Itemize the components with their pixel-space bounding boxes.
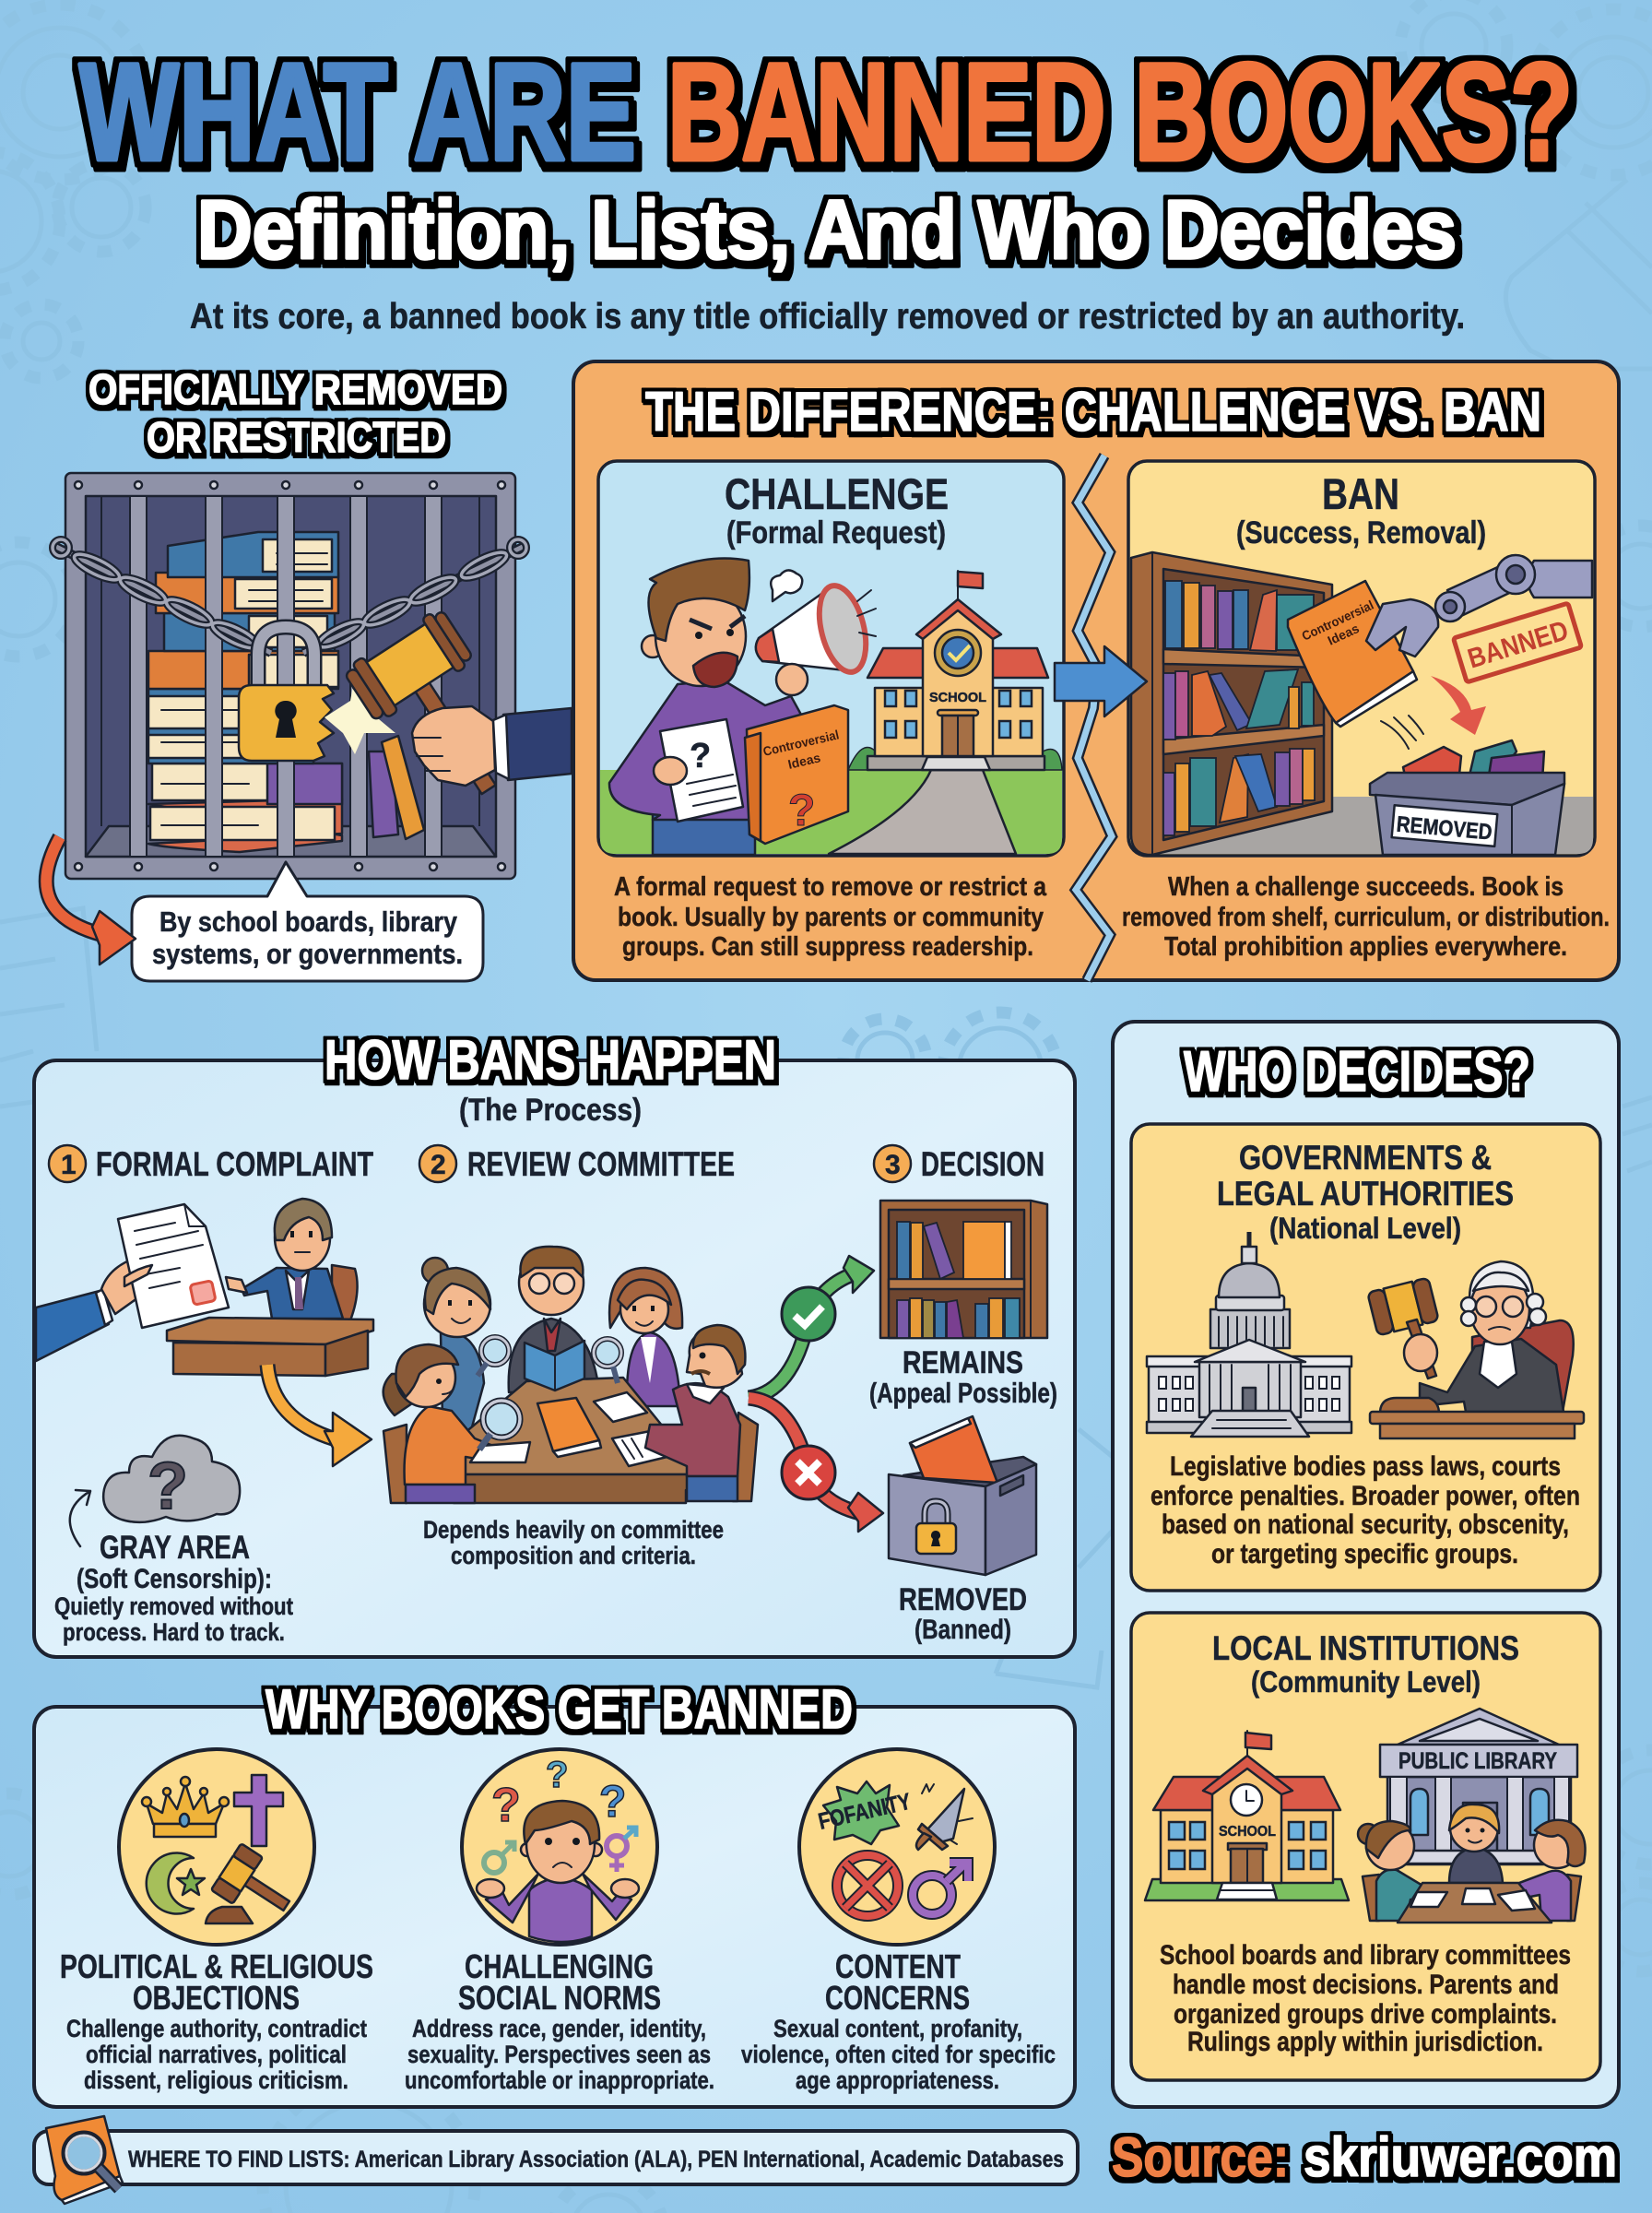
text: local institutions description: Rulings apply within jurisdiction. bbox=[1187, 2027, 1543, 2057]
illustration: capitol building bbox=[1147, 1232, 1351, 1437]
text: where to find lists: WHERE TO FIND LISTS: American Library Association (ALA), PEN International, Academic Databases bbox=[128, 2147, 1064, 2172]
illustration: robotic arm removes book: Controversial bbox=[1300, 598, 1375, 644]
step 2 label: REVIEW COMMITTEE bbox=[467, 1145, 735, 1183]
arrow: into removed bin bbox=[1431, 676, 1486, 735]
icon: book with magnifier bbox=[46, 2116, 123, 2204]
panel: ban bbox=[1128, 461, 1595, 856]
step 3 label: DECISION bbox=[921, 1145, 1044, 1183]
text: content concerns: age appropriateness. bbox=[796, 2066, 999, 2094]
arrow: red curved to callout bbox=[46, 837, 136, 964]
text: gray area: (Soft Censorship): bbox=[77, 1564, 272, 1594]
text: content concerns bbox=[741, 1947, 1056, 2094]
icon circle: social norms: ? bbox=[546, 1755, 568, 1795]
title bbox=[79, 34, 1573, 189]
bar: where to find lists bbox=[34, 2116, 1078, 2204]
subtitle: Definition, Lists, And Who Decides bbox=[197, 184, 1457, 277]
text: removed bbox=[899, 1582, 1027, 1645]
divider: lightning crack bbox=[1076, 456, 1112, 980]
icon circle: social norms: ? bbox=[599, 1778, 626, 1827]
text: committee note bbox=[423, 1516, 724, 1569]
text: political and religious: dissent, religious criticism. bbox=[84, 2066, 348, 2094]
illustration: removed bin: REMOVED bbox=[1396, 812, 1493, 846]
panel: why books get banned bbox=[34, 1678, 1075, 2107]
illustration: robotic arm removes book bbox=[1288, 555, 1592, 727]
heading: officially removed or restricted: OFFICIALLY REMOVED bbox=[88, 365, 502, 413]
subheading: the process: (The Process) bbox=[459, 1093, 642, 1128]
panel: challenge bbox=[598, 461, 1064, 856]
source credit: Source: bbox=[1112, 2126, 1289, 2188]
heading: challenge: CHALLENGE bbox=[725, 469, 949, 518]
text: remains bbox=[869, 1345, 1057, 1409]
text: governments description: Legislative bodies pass laws, courts bbox=[1170, 1451, 1561, 1482]
heading: who decides: WHO DECIDES? bbox=[1184, 1040, 1530, 1104]
icon circle: political and religious bbox=[119, 1749, 314, 1945]
chains bbox=[53, 539, 526, 653]
callout: who removes: By school boards, library bbox=[159, 905, 458, 938]
illustration: formal complaint bbox=[36, 1199, 373, 1376]
text: challenge description: groups. Can still suppress readership. bbox=[622, 932, 1033, 962]
illustration: locked book cage bbox=[53, 473, 572, 879]
arrow: complaint to committee bbox=[267, 1365, 372, 1466]
title: WHAT ARE bbox=[79, 34, 636, 189]
arrow: challenge to ban bbox=[1055, 646, 1147, 716]
fallen books bbox=[369, 751, 398, 837]
icon: gray cloud: ? bbox=[148, 1450, 188, 1523]
text: removed: (Banned) bbox=[914, 1615, 1011, 1645]
card: governments and legal authorities: LEGAL AUTHORITIES bbox=[1217, 1175, 1514, 1213]
illustration: robotic arm removes book: Ideas bbox=[1326, 621, 1362, 648]
icon circle: social norms bbox=[462, 1749, 657, 1945]
illustration: school: SCHOOL bbox=[1219, 1824, 1276, 1840]
source credit bbox=[1112, 2126, 1617, 2188]
illustration: school scene bbox=[600, 571, 1062, 854]
bars bbox=[130, 496, 442, 857]
text: content concerns: Sexual content, profanity, bbox=[773, 2015, 1022, 2042]
illustration: public library meeting: PUBLIC LIBRARY bbox=[1398, 1748, 1557, 1774]
text: governments description: or targeting specific groups. bbox=[1211, 1539, 1518, 1569]
icon circle: social norms: ? bbox=[491, 1779, 521, 1832]
illustration: review committee bbox=[384, 1247, 758, 1503]
text: local institutions description bbox=[1160, 1940, 1571, 2057]
icon circle: content concerns bbox=[799, 1749, 995, 1945]
illustration: locked box bbox=[889, 1416, 1036, 1575]
definition sentence: At its core, a banned book is any title officially removed or restricted by an authority. bbox=[190, 297, 1465, 337]
illustration: school bbox=[1145, 1731, 1349, 1900]
callout: who removes bbox=[132, 862, 483, 981]
text: local institutions description: handle most decisions. Parents and bbox=[1173, 1970, 1559, 2000]
step 2 label bbox=[419, 1145, 735, 1183]
arrow: gray area to cloud bbox=[70, 1490, 90, 1546]
card: governments and legal authorities bbox=[1131, 1124, 1600, 1591]
heading: officially removed or restricted: OR RESTRICTED bbox=[147, 413, 446, 461]
illustration: angry parent with megaphone: ? bbox=[788, 787, 815, 835]
subheading: formal request: (Formal Request) bbox=[726, 515, 946, 550]
step 1 label: 1 bbox=[61, 1150, 77, 1180]
source credit: skriuwer.com bbox=[1304, 2126, 1617, 2188]
text: committee note: composition and criteria. bbox=[451, 1542, 696, 1569]
text: remains: REMAINS bbox=[903, 1345, 1023, 1380]
text: challenge description: book. Usually by parents or community bbox=[618, 903, 1044, 932]
heading: how bans happen: HOW BANS HAPPEN bbox=[324, 1029, 776, 1091]
text: social norms bbox=[405, 1947, 714, 2094]
heading: local institutions: LOCAL INSTITUTIONS bbox=[1212, 1629, 1519, 1667]
impact spark bbox=[324, 676, 395, 754]
step 1 label: FORMAL COMPLAINT bbox=[96, 1145, 373, 1183]
illustration: angry parent with megaphone: ? bbox=[690, 737, 711, 775]
text: challenge description bbox=[614, 872, 1047, 962]
subheading: national level: (National Level) bbox=[1269, 1212, 1461, 1245]
text: content concerns: CONTENT bbox=[835, 1947, 961, 1985]
illustration: removed bin bbox=[1370, 740, 1564, 855]
heading: governments: GOVERNMENTS & bbox=[1239, 1139, 1492, 1177]
callout: who removes: systems, or governments. bbox=[152, 938, 463, 970]
panel: who decides bbox=[1113, 1022, 1619, 2107]
book stack bbox=[148, 532, 342, 852]
motion lines bbox=[1381, 716, 1423, 749]
heading: why books get banned: WHY BOOKS GET BANNED bbox=[266, 1678, 853, 1740]
text: social norms: CHALLENGING bbox=[465, 1947, 654, 1985]
step 3 label bbox=[874, 1145, 1044, 1183]
illustration: floor and bookcase bbox=[1131, 552, 1593, 855]
illustration: bookshelf remains bbox=[880, 1201, 1047, 1338]
card: local institutions bbox=[1131, 1613, 1600, 2080]
text: gray area: process. Hard to track. bbox=[63, 1618, 285, 1646]
subheading: success removal: (Success, Removal) bbox=[1236, 515, 1486, 550]
panel: the difference bbox=[573, 361, 1619, 980]
panel: how bans happen bbox=[34, 1029, 1075, 1657]
illustration: angry parent with megaphone: Ideas bbox=[786, 750, 822, 772]
step 3 label: 3 bbox=[885, 1150, 901, 1180]
text: social norms: SOCIAL NORMS bbox=[458, 1979, 661, 2017]
text: political and religious: OBJECTIONS bbox=[133, 1979, 300, 2017]
text: committee note: Depends heavily on committee bbox=[423, 1516, 724, 1544]
heading: officially removed or restricted bbox=[88, 365, 502, 461]
illustration: judge with gavel bbox=[1367, 1261, 1584, 1438]
text: content concerns: CONCERNS bbox=[825, 1979, 970, 2017]
text: ban description: Total prohibition applies everywhere. bbox=[1164, 932, 1567, 962]
illustration: angry parent with megaphone bbox=[609, 559, 876, 855]
padlock bbox=[239, 627, 334, 761]
step 1 label bbox=[49, 1145, 373, 1183]
gavel and hand bbox=[342, 607, 572, 821]
text: challenge description: A formal request to remove or restrict a bbox=[614, 872, 1047, 902]
text: social norms: Address race, gender, identity, bbox=[412, 2015, 706, 2042]
text: removed: REMOVED bbox=[899, 1582, 1027, 1617]
text: governments description bbox=[1150, 1451, 1580, 1569]
text: political and religious: official narratives, political bbox=[86, 2041, 347, 2068]
text: political and religious bbox=[60, 1947, 373, 2094]
text: ban description: When a challenge succeeds. Book is bbox=[1168, 872, 1564, 902]
illustration: angry parent with megaphone: Controversial bbox=[761, 727, 841, 759]
step 2 label: 2 bbox=[431, 1150, 446, 1180]
icon circle: content concerns: FOFANITY bbox=[816, 1789, 914, 1835]
text: political and religious: Challenge authority, contradict bbox=[66, 2015, 367, 2042]
decision branch: remains bbox=[749, 1256, 874, 1398]
text: social norms: sexuality. Perspectives seen as bbox=[407, 2041, 711, 2068]
decision branch: removed bbox=[749, 1398, 883, 1532]
illustration: public library meeting bbox=[1358, 1709, 1586, 1923]
text: ban description bbox=[1122, 872, 1610, 962]
rivets bbox=[75, 481, 505, 870]
illustration: school scene: SCHOOL bbox=[929, 690, 986, 705]
subheading: community level: (Community Level) bbox=[1251, 1665, 1481, 1698]
text: gray area: GRAY AREA bbox=[100, 1530, 250, 1566]
heading: ban: BAN bbox=[1322, 469, 1399, 518]
stamp: banned: BANNED bbox=[1464, 615, 1572, 675]
text: gray area: Quietly removed without bbox=[54, 1592, 293, 1620]
text: local institutions description: School boards and library committees bbox=[1160, 1940, 1571, 1970]
text: governments description: based on national security, obscenity, bbox=[1162, 1509, 1569, 1540]
text: local institutions description: organized groups drive complaints. bbox=[1174, 1999, 1557, 2030]
text: content concerns: violence, often cited for specific bbox=[741, 2041, 1056, 2068]
icon: gray cloud bbox=[103, 1436, 240, 1523]
text: gray area bbox=[54, 1530, 293, 1646]
text: social norms: uncomfortable or inappropriate. bbox=[405, 2066, 714, 2094]
text: political and religious: POLITICAL & RELIGIOUS bbox=[60, 1947, 373, 1985]
text: remains: (Appeal Possible) bbox=[869, 1377, 1057, 1409]
